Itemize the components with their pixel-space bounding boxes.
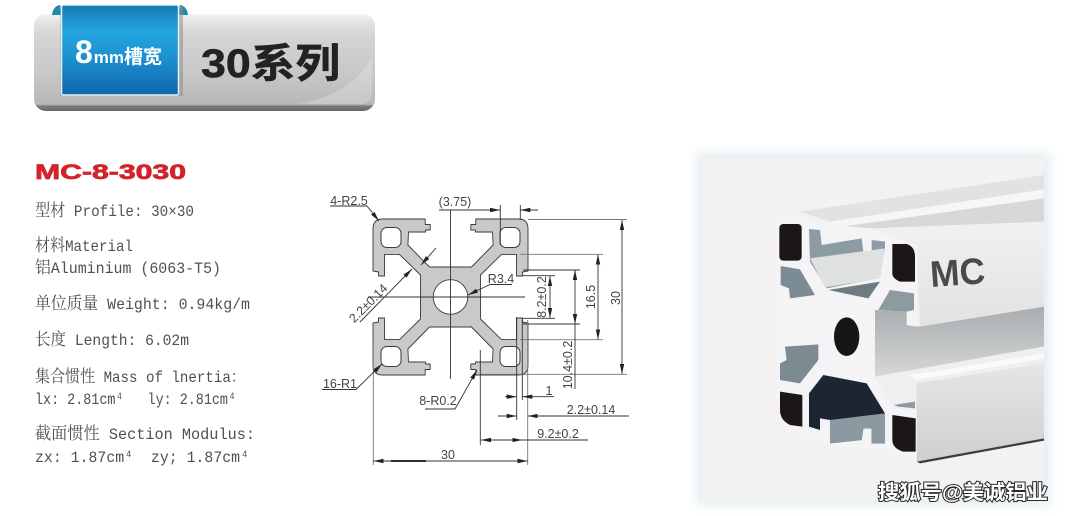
specifications text: 型材 Profile: 30×30	[35, 196, 194, 221]
dimension: 16.5	[520, 254, 603, 340]
model number: MC-8-3030	[35, 161, 186, 184]
callout: 16-R1	[322, 364, 382, 391]
dimension: 9.2: 9.2±0.2	[537, 427, 579, 441]
dimension: 2.2: 2.2±0.14	[567, 403, 615, 417]
dimension: 30 height	[480, 220, 627, 374]
dimension: 16.5: 16.5	[584, 285, 598, 309]
series banner	[34, 5, 375, 111]
profile section	[373, 219, 528, 375]
specifications text: lx: 2.81cm⁴ ly: 2.81cm⁴	[35, 391, 236, 409]
dimension: 1: 1	[546, 384, 553, 398]
MC logo on extrusion: MC	[929, 250, 986, 295]
callout: 8-R0.2	[419, 370, 477, 409]
callout: 4-R2.5	[330, 194, 379, 221]
specifications text: 铝Aluminium (6063-T5)	[35, 253, 221, 278]
centre lines	[368, 210, 525, 379]
series title: 30系列	[201, 42, 340, 86]
specifications text: 截面惯性 Section Modulus:	[35, 419, 255, 444]
watermark: 搜狐号@美诚铝业	[878, 480, 1048, 504]
product photo	[696, 153, 1050, 505]
dimension: 8.2: 8.2±0.2	[535, 276, 549, 318]
callout: 8-R0.2: 8-R0.2	[419, 394, 457, 408]
specifications text: zx: 1.87cm⁴ zy; 1.87cm⁴	[35, 449, 249, 467]
dimension: 10.4: 10.4±0.2	[561, 341, 575, 389]
dimension: 10.4	[523, 270, 580, 389]
tab label: 8mm槽宽	[75, 34, 162, 70]
dimension: 30 height: 30	[609, 291, 623, 305]
banner blue tab	[52, 5, 188, 96]
callout: diagonal 2.2: 2.2±0.14	[346, 281, 391, 326]
dimension: 3.75: (3.75)	[439, 195, 471, 209]
dimension: 8.2	[522, 276, 555, 318]
photo glow	[696, 153, 1050, 505]
photo background	[702, 158, 1044, 500]
dimension: 2.2	[498, 403, 629, 417]
dimension: 1	[505, 317, 554, 465]
callout: R3.4: R3.4	[488, 272, 514, 286]
banner grey plate	[34, 14, 375, 111]
dimension: 30 width: 30	[441, 448, 455, 462]
specifications text: 材料Material	[35, 231, 133, 256]
specifications text	[35, 196, 255, 467]
specifications text: 单位质量 Weight: 0.94kg/m	[35, 289, 250, 314]
aluminium extrusion	[773, 175, 1044, 463]
callout: R3.4	[468, 272, 514, 295]
callout: diagonal 2.2	[346, 248, 436, 326]
technical cross-section drawing	[322, 194, 629, 465]
specifications text: 集合惯性 Mass of lnertia：	[35, 362, 245, 387]
dimension: 9.2	[480, 350, 588, 445]
specifications text: 长度 Length: 6.02m	[35, 325, 189, 350]
dimension: 3.75	[439, 195, 538, 245]
callout: 4-R2.5: 4-R2.5	[330, 194, 368, 208]
callout: 16-R1: 16-R1	[323, 377, 357, 391]
